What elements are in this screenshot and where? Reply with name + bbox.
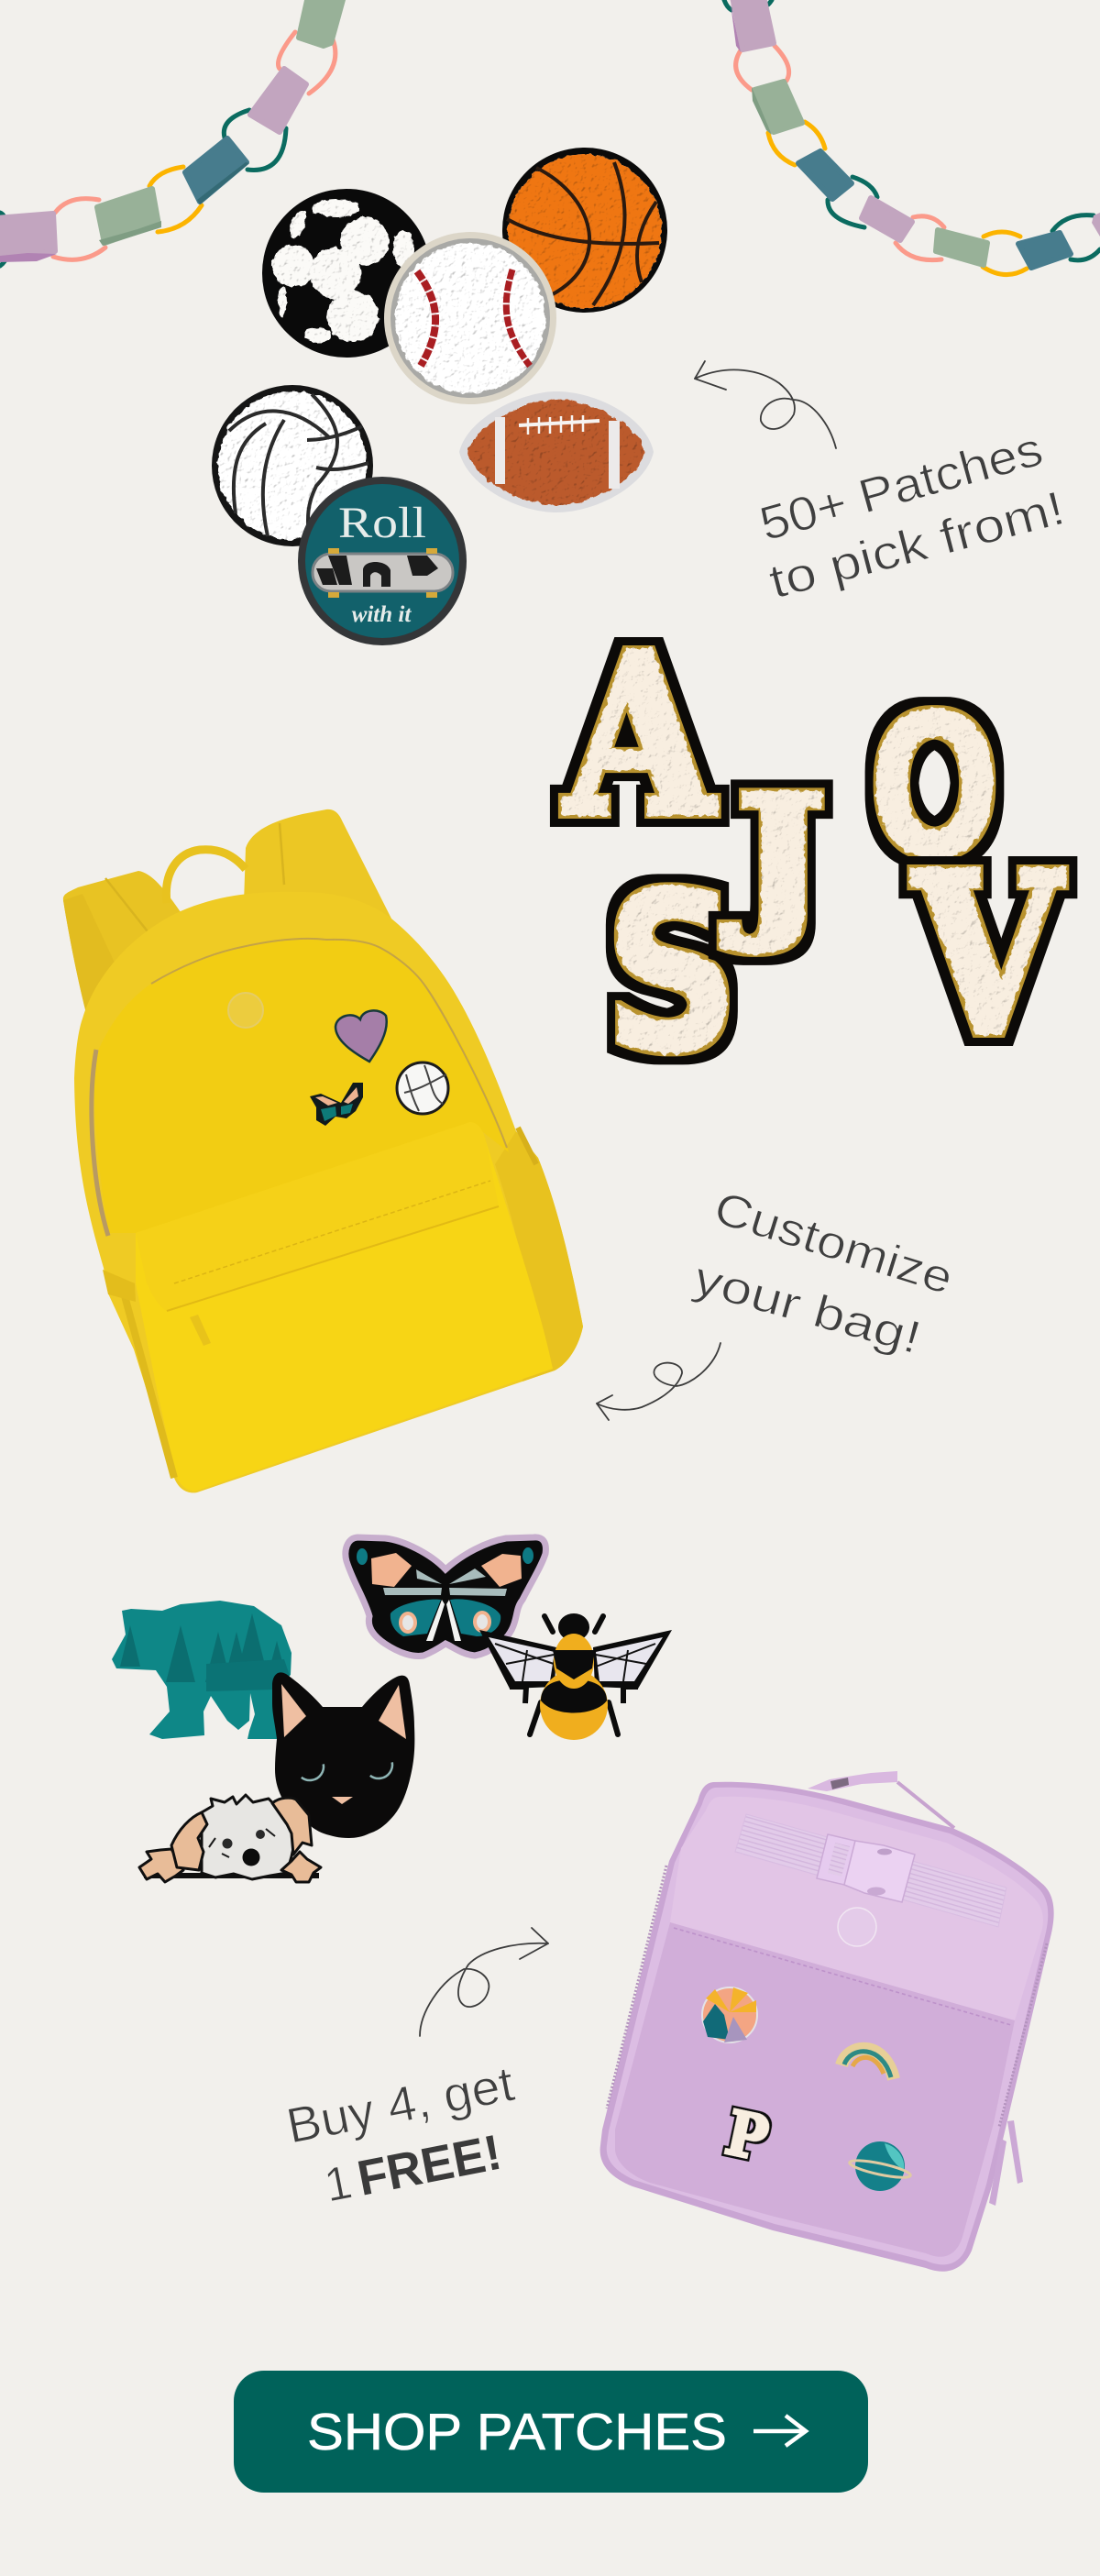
animal patches cluster: [112, 1537, 672, 1882]
letter patch A: A: [564, 606, 715, 864]
paper chain left: [0, 0, 344, 266]
patch: rainbow: [842, 2049, 894, 2079]
text: customize your bag: your bag!: [688, 1252, 927, 1363]
patch: mini butterfly: [310, 1083, 363, 1126]
arrow: to backpack: [597, 1343, 720, 1420]
patch: large butterfly: [346, 1537, 545, 1656]
lilac lunch bag: [600, 1771, 1054, 2272]
skateboard: [313, 548, 453, 598]
top handle: [808, 1771, 954, 1828]
text: buy 4 get 1 free: Buy 4, get: [282, 2056, 519, 2154]
felt pocket: [615, 1922, 1015, 2257]
patch: bee: [479, 1613, 672, 1740]
text: 50+ patches: 50+ Patches: [754, 423, 1049, 552]
patch: soccer ball: [262, 189, 431, 358]
rim: [607, 1788, 1048, 2264]
webbing strap: [735, 1814, 1006, 1927]
bag shell: [600, 1782, 1054, 2272]
text: buy 4 get 1 free: FREE!: [353, 2125, 506, 2207]
upper panel: [670, 1797, 1043, 2020]
chenille letter patches: [564, 606, 1063, 1101]
patch: black cat: [272, 1672, 414, 1838]
patch: basketball: [502, 148, 667, 313]
pocket flap: [136, 1122, 499, 1311]
paper chain right: [724, 0, 1100, 275]
patch: mini volleyball: [397, 1062, 448, 1114]
zipper pulls: [989, 2120, 1023, 2206]
letter patch S: S: [605, 847, 739, 1101]
right side gusset: [495, 1131, 583, 1382]
text: buy 4 get 1 free: [282, 2056, 519, 2213]
side zipper lines: [607, 1866, 1047, 2127]
with it label: with it: [352, 602, 412, 627]
roll label: Roll: [338, 499, 426, 547]
letter patch O: O: [869, 673, 1000, 901]
text: customize your bag: [688, 1182, 959, 1363]
letter patch J: J: [722, 759, 825, 955]
left seam: [124, 1293, 174, 1478]
letter patch V: V: [912, 825, 1063, 1084]
arrow: to lunch bag: [420, 1928, 548, 2036]
patch: sun and mountains: [702, 1987, 757, 2042]
text: 50+ patches: to pick from!: [764, 481, 1070, 610]
patch: heart: [336, 1010, 387, 1062]
logo stamp: [838, 1908, 876, 1946]
logo stamp: [228, 993, 263, 1028]
straps and handle: [63, 809, 391, 1013]
sports patches cluster: [212, 148, 667, 645]
button label: SHOP PATCHES: [307, 2403, 727, 2461]
upper panel: [94, 939, 509, 1233]
bag body: [74, 892, 583, 1492]
zipper edge: [151, 939, 507, 1148]
front pocket: [136, 1122, 553, 1491]
arrow: to sports patches: [695, 361, 836, 448]
pocket zip tab: [190, 1315, 211, 1346]
patch: planet: [848, 2141, 912, 2191]
buckle: [817, 1834, 915, 1902]
patch: peeking dog: [139, 1795, 321, 1882]
text: customize your bag: Customize: [709, 1182, 959, 1304]
patch: baseball: [384, 232, 556, 404]
patch: football: [459, 391, 654, 512]
patch: bear: [112, 1601, 292, 1739]
yellow backpack: [63, 809, 583, 1492]
patch: roll with it: [298, 477, 467, 645]
button: shop patches: [234, 2371, 868, 2493]
patch: letter P: P: [720, 2097, 775, 2175]
text: buy 4 get 1 free: 1: [320, 2155, 357, 2213]
text: 50+ patches: [754, 423, 1070, 610]
button arrow: [754, 2416, 806, 2446]
patch: volleyball: [212, 385, 373, 546]
